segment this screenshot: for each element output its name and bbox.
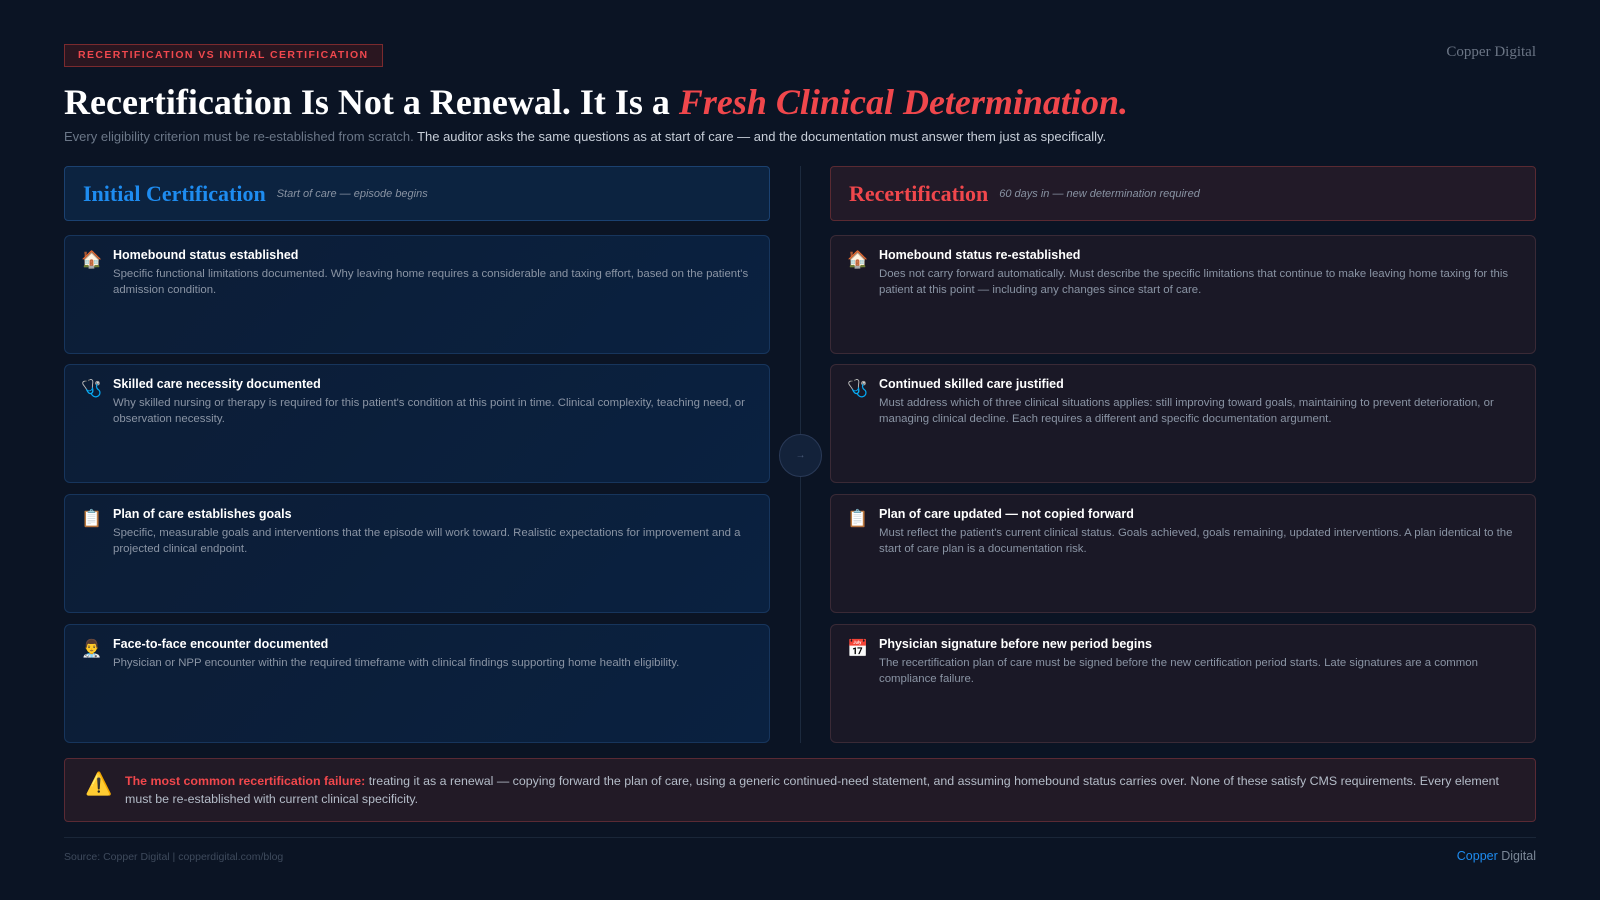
- card: homebound recert: 🏠: [847, 250, 869, 269]
- header: initial: Initial Certification: [83, 180, 266, 206]
- card: plan initial: Specific, measurable goals and interventions that the episode will work toward. Realistic expectations for improvement and a projected clinical endpoint.: [113, 527, 740, 555]
- card: skilled recert: [830, 364, 1536, 483]
- card: signature recert: [830, 624, 1536, 743]
- tag: RECERTIFICATION VS INITIAL CERTIFICATION: [78, 49, 368, 61]
- card: homebound initial: 🏠: [81, 250, 103, 269]
- header: initial: Start of care — episode begins: [277, 188, 428, 200]
- card: skilled initial: [64, 364, 770, 483]
- callout: ⚠️: [85, 771, 112, 796]
- card: homebound recert: Does not carry forward automatically. Must describe the specific limitations that continue to make leaving home taxing for this patient at this point — including any changes since start of care.: [879, 268, 1508, 296]
- card: skilled recert: 🩺: [847, 379, 869, 398]
- card: signature recert: The recertification plan of care must be signed before the new certification period starts. Late signatures are a common compliance failure.: [879, 657, 1478, 685]
- center icon: [779, 434, 822, 477]
- callout: The most common recertification failure: treating it as a renewal — copying forward the plan of care, using a generic continued-need statement, and assuming homebound status carries over. None of these satisfy CMS requirements. Every element must be re-established with current clinical specificity.: [125, 774, 1499, 806]
- header: recert: [830, 166, 1536, 221]
- card: f2f initial: 👨‍⚕️: [81, 639, 103, 658]
- card: f2f initial: Face-to-face encounter documented: [113, 637, 328, 651]
- footer brand: Copper Digital: [1457, 849, 1536, 863]
- card: signature recert: 📅: [847, 639, 869, 658]
- card: homebound initial: [64, 235, 770, 354]
- subtitle: Every eligibility criterion must be re-established from scratch. The auditor asks the same questions as at start of care — and the documentation must answer them just as specifically.: [64, 129, 1106, 144]
- card: plan recert: Must reflect the patient's current clinical status. Goals achieved, goals remaining, updated interventions. A plan identical to the start of care plan is a documentation risk.: [879, 527, 1512, 555]
- card: plan recert: Plan of care updated — not copied forward: [879, 507, 1134, 521]
- card: plan initial: [64, 494, 770, 613]
- card: plan recert: [830, 494, 1536, 613]
- center icon: →: [796, 450, 806, 461]
- card: skilled recert: Continued skilled care justified: [879, 377, 1064, 391]
- card: plan initial: Plan of care establishes goals: [113, 507, 292, 521]
- card: f2f initial: Physician or NPP encounter within the required timeframe with clinical findings supporting home health eligibility.: [113, 657, 679, 669]
- card: skilled initial: Skilled care necessity documented: [113, 377, 321, 391]
- card: homebound recert: Homebound status re-established: [879, 248, 1080, 262]
- tag: [64, 44, 382, 67]
- title: Recertification Is Not a Renewal. It Is a Fresh Clinical Determination.: [64, 82, 1128, 122]
- card: f2f initial: [64, 624, 770, 743]
- card: skilled initial: 🩺: [81, 379, 103, 398]
- header: initial: [64, 166, 770, 221]
- card: signature recert: Physician signature before new period begins: [879, 637, 1152, 651]
- header: recert: 60 days in — new determination required: [999, 188, 1200, 200]
- card: skilled recert: Must address which of three clinical situations applies: still improving toward goals, maintaining to prevent deterioration, or managing clinical decline. Each requires a different and specific documentation argument.: [879, 397, 1494, 425]
- card: plan initial: 📋: [81, 509, 103, 528]
- brand top: Copper Digital: [1446, 44, 1536, 60]
- card: skilled initial: Why skilled nursing or therapy is required for this patient's condition at this point in time. Clinical complexity, teaching need, or observation necessity.: [113, 397, 745, 425]
- card: homebound recert: [830, 235, 1536, 354]
- card: homebound initial: Specific functional limitations documented. Why leaving home requires a considerable and taxing effort, based on the patient's admission condition.: [113, 268, 748, 296]
- card: plan recert: 📋: [847, 509, 869, 528]
- card: homebound initial: Homebound status established: [113, 248, 298, 262]
- source: Source: Copper Digital | copperdigital.com/blog: [64, 851, 283, 863]
- callout: [64, 758, 1536, 822]
- header: recert: Recertification: [849, 180, 988, 206]
